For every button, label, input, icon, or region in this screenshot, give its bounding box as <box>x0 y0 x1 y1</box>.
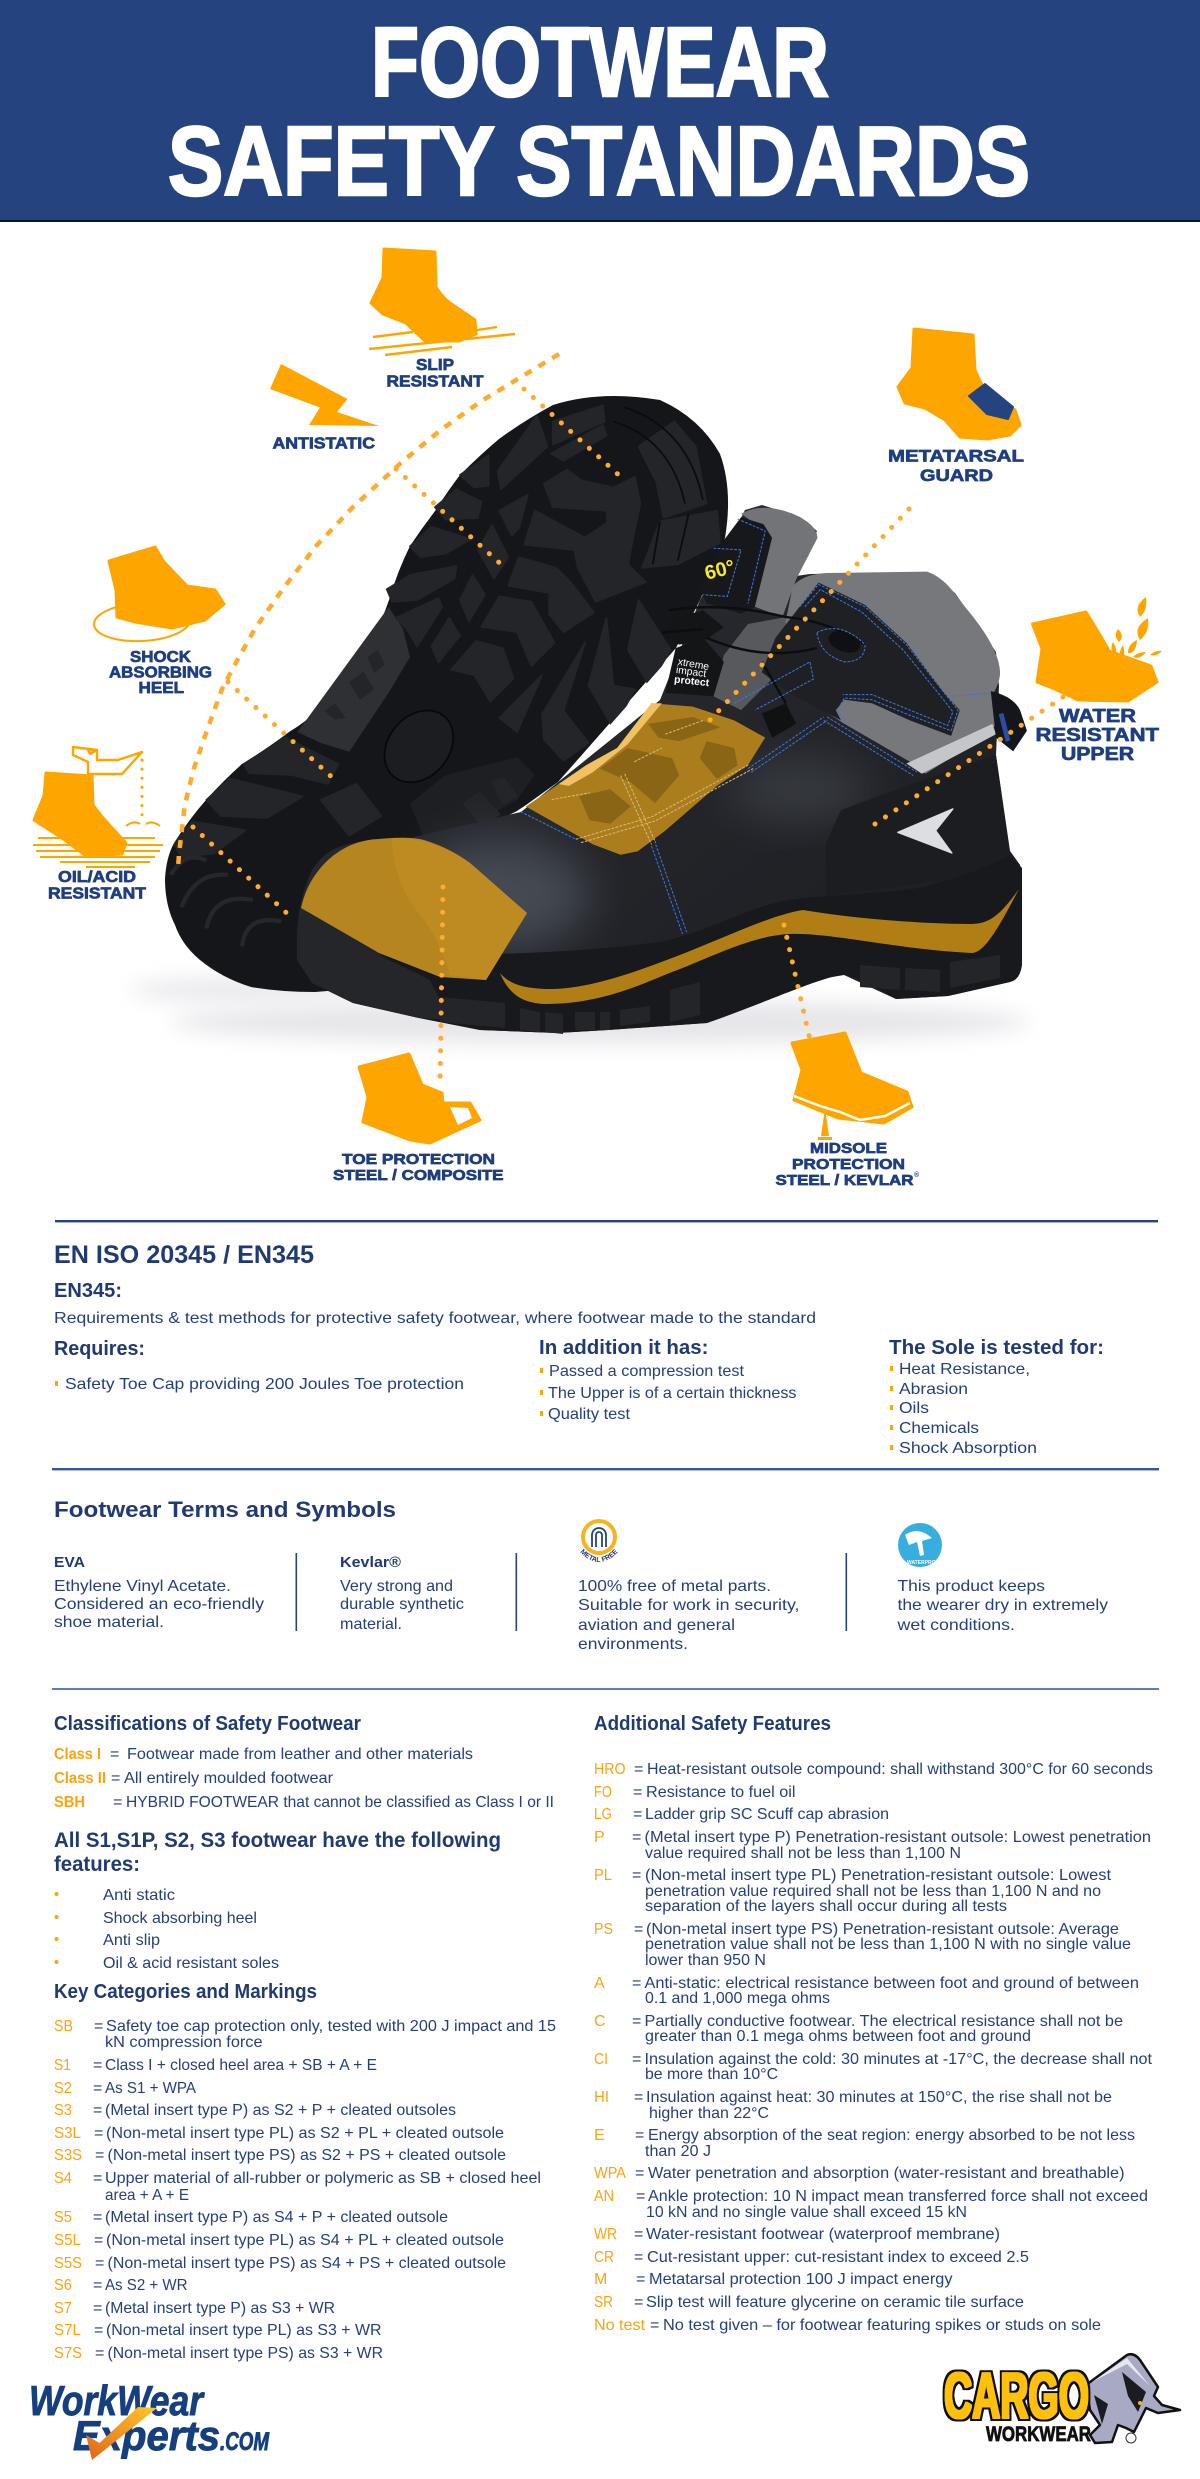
label: midsole protection: ® <box>914 1171 920 1179</box>
label: antistatic: ANTISTATIC <box>272 436 375 453</box>
class rows: = <box>113 1794 122 1811</box>
feature rows: Partially conductive footwear. The electrical resistance shall not be <box>644 2013 1123 2030</box>
category rows: (Non-metal insert type PL) as S2 + PL + cleated outsole <box>106 2125 504 2142</box>
category rows: S6 <box>54 2277 72 2294</box>
label: shock absorbing heel: ABSORBING <box>109 665 212 682</box>
icon: midsole protection <box>776 1033 920 1189</box>
column: sole tests: Oils <box>899 1400 929 1417</box>
feature rows: separation of the layers shall occur during all tests <box>645 1898 1007 1915</box>
heading: common features: All S1,S1P, S2, S3 footwear have the following <box>54 1829 501 1852</box>
category rows: S4 <box>54 2170 72 2187</box>
category rows: area + A + E <box>105 2187 189 2204</box>
term: waterproof <box>896 1578 1108 1634</box>
category rows <box>54 2018 556 2362</box>
panel: common features <box>54 1829 501 1972</box>
feature rows: = <box>634 1761 643 1778</box>
feature rows: PL <box>594 1867 612 1884</box>
label: metatarsal guard: GUARD <box>920 466 993 485</box>
term: EVA <box>54 1555 264 1631</box>
class rows: Footwear made from leather and other materials <box>127 1746 473 1763</box>
feature rows: than 20 J <box>645 2143 711 2160</box>
category rows: SB <box>54 2018 73 2035</box>
midsole highlight overlay <box>500 889 1019 1004</box>
heading: classifications: Classifications of Safety Footwear <box>54 1713 361 1735</box>
feature rows: = <box>634 2294 643 2311</box>
feature rows: Cut-resistant upper: cut-resistant index to exceed 2.5 <box>647 2249 1029 2266</box>
feature rows: PS <box>594 1921 613 1938</box>
feature rows: = <box>635 2127 644 2144</box>
feature rows: = <box>636 2271 645 2288</box>
column: sole tests: The Sole is tested for: <box>889 1337 1104 1359</box>
white gap between sole and boot <box>558 648 678 784</box>
category rows: = <box>93 2209 102 2226</box>
feature rows: HI <box>594 2089 609 2106</box>
feature rows: Heat-resistant outsole compound: shall withstand 300°C for 60 seconds <box>647 1761 1153 1778</box>
category rows: = <box>94 2018 103 2035</box>
feature rows: 0.1 and 1,000 mega ohms <box>645 1990 830 2007</box>
logo: WorkWear Experts <box>29 2377 270 2460</box>
badge text: WATERPROOF <box>907 1560 942 1566</box>
feature rows: lower than 950 N <box>645 1952 766 1969</box>
label: water resistant upper <box>1036 706 1159 764</box>
icon: slip resistant <box>369 249 515 390</box>
icon: metatarsal guard <box>888 329 1024 485</box>
feature rows: C <box>594 2013 606 2030</box>
panel: key categories <box>54 1981 556 2362</box>
lace area highlight overlay <box>526 703 765 855</box>
feature rows: Water-resistant footwear (waterproof membrane) <box>646 2226 1000 2243</box>
badge text: METAL FREE <box>580 1548 618 1562</box>
icon: waterproof badge <box>898 1523 942 1567</box>
term: waterproof: This product keeps <box>898 1578 1045 1595</box>
feature rows: Insulation against heat: 30 minutes at 150°C, the rise shall not be <box>646 2089 1112 2106</box>
class rows: All entirely moulded footwear <box>124 1770 334 1787</box>
icon: metal free badge <box>580 1519 618 1562</box>
category rows: S3L <box>54 2125 81 2142</box>
term: EVA: Considered an eco-friendly <box>54 1596 264 1613</box>
feature rows: higher than 22°C <box>649 2105 769 2122</box>
panel: footwear terms and symbols <box>52 1497 1159 1690</box>
class rows: Class I <box>54 1746 101 1763</box>
logo: WorkWear Experts: WorkWear <box>29 2377 205 2424</box>
term: Kevlar: Kevlar® <box>340 1555 401 1571</box>
category rows: S5L <box>54 2232 81 2249</box>
category rows: Safety toe cap protection only, tested with 200 J impact and 15 <box>106 2018 556 2035</box>
feature rows: WR <box>594 2226 617 2243</box>
outsole <box>297 855 1022 1033</box>
tongue label text: xtreme <box>677 657 710 673</box>
label: shock absorbing heel: SHOCK <box>130 649 191 666</box>
column: in addition: In addition it has: <box>539 1337 708 1359</box>
feature rows: greater than 0.1 mega ohms between foot and ground <box>645 2028 1031 2045</box>
boot floor shadow <box>130 978 1030 1044</box>
feature rows: = <box>636 2188 645 2205</box>
category rows: (Metal insert type P) as S2 + P + cleated outsoles <box>105 2102 456 2119</box>
feature rows: = <box>632 2013 641 2030</box>
category rows: As S2 + WR <box>105 2277 188 2294</box>
feature rows: = <box>634 2249 643 2266</box>
feature rows: No test given – for footwear featuring spikes or studs on sole <box>663 2317 1101 2334</box>
feature rows: WPA <box>594 2165 626 2182</box>
feature bullets: Anti static <box>103 1887 175 1904</box>
feature rows: = <box>632 1975 641 1992</box>
category rows: = <box>93 2170 102 2187</box>
feature bullets <box>54 1887 279 1972</box>
feature rows: = <box>632 1867 641 1884</box>
feature rows: AN <box>594 2188 614 2205</box>
feature bullets: Oil & acid resistant soles <box>103 1955 279 1972</box>
heading: additional features: Additional Safety Features <box>594 1713 831 1735</box>
feature rows: penetration value shall not be less than 1,100 N with no single value <box>645 1936 1131 1953</box>
category rows: As S1 + WPA <box>105 2080 196 2097</box>
feature rows: = <box>632 1829 641 1846</box>
feature rows: Energy absorption of the seat region: energy absorbed to be not less <box>648 2127 1135 2144</box>
feature rows: = <box>633 1784 642 1801</box>
label: oil/acid resistant: OIL/ACID <box>58 869 136 886</box>
column: requires: Safety Toe Cap providing 200 Joules Toe protection <box>65 1376 464 1393</box>
term: metal free: aviation and general <box>578 1617 735 1634</box>
feature rows: Ladder grip SC Scuff cap abrasion <box>645 1806 889 1823</box>
tongue label text <box>674 657 710 689</box>
label: slip resistant: RESISTANT <box>386 374 484 390</box>
category rows: S3S <box>54 2147 82 2164</box>
label: toe protection: TOE PROTECTION <box>342 1151 495 1168</box>
heading: key categories: Key Categories and Markings <box>54 1981 317 2003</box>
class rows: Class II <box>54 1770 106 1787</box>
class rows <box>54 1746 554 1811</box>
feature bullets: Shock absorbing heel <box>103 1910 257 1927</box>
category rows: S5S <box>54 2255 82 2272</box>
label: water resistant upper: RESISTANT <box>1036 725 1159 745</box>
panel: additional safety features <box>594 1713 1153 2334</box>
boot upper details <box>521 508 1027 934</box>
feature rows: E <box>594 2127 605 2144</box>
term: metal free: Suitable for work in security, <box>578 1597 800 1614</box>
term: EVA: Ethylene Vinyl Acetate. <box>54 1578 231 1595</box>
feature rows: = <box>632 2051 641 2068</box>
category rows: S7 <box>54 2300 72 2317</box>
feature rows: Insulation against the cold: 30 minutes at -17°C, the decrease shall not <box>644 2051 1153 2068</box>
panel: EN ISO 20345 / EN345 <box>52 1220 1159 1470</box>
category rows: (Non-metal insert type PS) as S2 + PS + cleated outsole <box>108 2147 506 2164</box>
label: metatarsal guard: METATARSAL <box>888 446 1024 466</box>
category rows: = <box>93 2057 102 2074</box>
category rows: S5 <box>54 2209 72 2226</box>
category rows: S1 <box>54 2057 71 2074</box>
feature rows: = <box>633 1806 642 1823</box>
category rows: Upper material of all-rubber or polymeric as SB + closed heel <box>105 2170 541 2187</box>
category rows: = <box>94 2125 103 2142</box>
icon: water resistant upper <box>1032 597 1162 764</box>
icon: oil / acid resistant <box>33 747 163 903</box>
logo: WorkWear Experts: Experts <box>73 2412 220 2459</box>
feature rows: Slip test will feature glycerine on ceramic tile surface <box>646 2294 1024 2311</box>
label: midsole protection: PROTECTION <box>792 1156 905 1173</box>
label: oil/acid resistant <box>48 869 146 903</box>
feature rows: M <box>594 2271 607 2288</box>
column: in addition: Quality test <box>548 1406 631 1423</box>
term: waterproof: wet conditions. <box>896 1617 1015 1634</box>
feature rows: FO <box>594 1784 612 1801</box>
feature rows: penetration value required shall not be less than 1,100 N and no <box>645 1883 1101 1900</box>
column: sole tests <box>889 1337 1104 1457</box>
term: Kevlar <box>340 1555 464 1633</box>
category rows: = <box>93 2102 102 2119</box>
logo: WorkWear Experts: .COM <box>220 2428 270 2456</box>
category rows: S2 <box>54 2080 72 2097</box>
column: requires: Requires: <box>54 1338 145 1360</box>
category rows: = <box>94 2322 103 2339</box>
feature rows: A <box>594 1975 605 1992</box>
category rows: = <box>93 2277 102 2294</box>
feature bullets: Anti slip <box>103 1932 160 1949</box>
title: FOOTWEAR <box>371 7 829 117</box>
label: midsole protection <box>776 1140 920 1189</box>
heading: EN ISO: EN ISO 20345 / EN345 <box>54 1241 314 1269</box>
feature rows: = <box>634 2089 643 2106</box>
feature rows: No test <box>594 2317 646 2334</box>
term: metal free <box>578 1578 800 1653</box>
feature rows: P <box>594 1829 605 1846</box>
tongue label text: impact <box>675 665 707 680</box>
feature rows: (Non-metal insert type PS) Penetration-resistant outsole: Average <box>646 1921 1119 1938</box>
label: shock absorbing heel <box>109 649 212 697</box>
feature rows: = <box>634 1921 643 1938</box>
term: metal free: 100% free of metal parts. <box>578 1578 771 1595</box>
heading: common features <box>54 1829 501 1876</box>
category rows: (Non-metal insert type PL) as S4 + PL + cleated outsole <box>106 2232 504 2249</box>
label: shock absorbing heel: HEEL <box>138 680 184 697</box>
column: sole tests: Abrasion <box>899 1381 968 1398</box>
term: EVA: EVA <box>54 1555 86 1571</box>
dotted leader lines <box>193 389 1063 1093</box>
feature rows: = <box>634 2226 643 2243</box>
feature rows: Ankle protection: 10 N impact mean transferred force shall not exceed <box>648 2188 1148 2205</box>
class rows: SBH <box>54 1794 85 1811</box>
label: toe protection <box>333 1151 504 1184</box>
feature rows: SR <box>594 2294 613 2311</box>
category rows: = <box>95 2255 104 2272</box>
feature rows: CI <box>594 2051 608 2068</box>
category rows: = <box>94 2232 103 2249</box>
feature rows: Metatarsal protection 100 J impact energy <box>649 2271 952 2288</box>
feature rows: HRO <box>594 1761 626 1778</box>
bull mascot <box>1086 2354 1180 2443</box>
label: slip resistant: SLIP <box>416 357 454 374</box>
title <box>168 7 1030 216</box>
term: waterproof: the wearer dry in extremely <box>898 1597 1108 1614</box>
intro text: Requirements & test methods for protective safety footwear, where footwear made to the standard <box>54 1310 816 1327</box>
column: sole tests: Chemicals <box>899 1420 979 1437</box>
label: midsole protection: STEEL / KEVLAR <box>776 1172 914 1189</box>
dashed arc guide <box>178 354 559 868</box>
feature rows: CR <box>594 2249 614 2266</box>
term: Kevlar: material. <box>340 1616 402 1633</box>
term: EVA: shoe material. <box>54 1614 164 1631</box>
class rows: HYBRID FOOTWEAR that cannot be classified as Class I or II <box>126 1794 554 1811</box>
category rows: = <box>93 2300 102 2317</box>
feature rows <box>594 1761 1153 2334</box>
category rows: = <box>95 2147 104 2164</box>
heading: terms: Footwear Terms and Symbols <box>54 1497 396 1522</box>
feature rows: be more than 10°C <box>645 2066 778 2083</box>
toe cap highlight overlay <box>301 838 527 980</box>
feature rows: 10 kN and no single value shall exceed 15 kN <box>646 2204 967 2221</box>
category rows: = <box>93 2080 102 2097</box>
work boot <box>297 505 1027 1034</box>
feature rows: LG <box>594 1806 612 1823</box>
column: in addition <box>539 1337 796 1423</box>
panel: classifications <box>54 1713 554 1811</box>
term: Kevlar: durable synthetic <box>340 1596 464 1613</box>
column: in addition: Passed a compression test <box>549 1363 745 1380</box>
logo text on tongue: 60° <box>703 556 737 585</box>
icon: shock absorbing heel <box>93 547 224 697</box>
column: sole tests: Heat Resistance, <box>899 1361 1030 1378</box>
label: slip resistant <box>386 357 484 390</box>
title: SAFETY STANDARDS <box>168 106 1030 216</box>
label: toe protection: STEEL / COMPOSITE <box>333 1167 504 1184</box>
category rows: (Metal insert type P) as S3 + WR <box>105 2300 335 2317</box>
column: sole tests: Shock Absorption <box>899 1440 1037 1457</box>
column: in addition: The Upper is of a certain thickness <box>548 1385 796 1402</box>
category rows: (Non-metal insert type PS) as S4 + PS + cleated outsole <box>108 2255 506 2272</box>
heading: EN345: EN345: <box>54 1280 122 1302</box>
category rows: S7L <box>54 2322 81 2339</box>
logo: Cargo Workwear <box>944 2354 1180 2446</box>
category rows: kN compression force <box>105 2034 263 2051</box>
boot sole view <box>165 396 728 992</box>
feature rows: = <box>650 2317 659 2334</box>
Cargo wordmark: CARGO <box>944 2359 1089 2432</box>
feature rows: Anti-static: electrical resistance between foot and ground of between <box>644 1975 1139 1992</box>
category rows: Class I + closed heel area + SB + A + E <box>105 2057 377 2074</box>
category rows: S7S <box>54 2345 82 2362</box>
column: requires <box>54 1338 464 1393</box>
feature rows: (Non-metal insert type PL) Penetration-resistant outsole: Lowest <box>645 1867 1112 1884</box>
label: water resistant upper: UPPER <box>1061 744 1134 764</box>
icon: toe protection <box>333 1054 504 1184</box>
feature rows: (Metal insert type P) Penetration-resistant outsole: Lowest penetration <box>644 1829 1151 1846</box>
label: water resistant upper: WATER <box>1059 706 1136 726</box>
tongue label text: protect <box>674 675 710 689</box>
category rows: = <box>95 2345 104 2362</box>
category rows: (Metal insert type P) as S4 + P + cleated outsole <box>105 2209 448 2226</box>
feature rows: = <box>635 2165 644 2182</box>
label: metatarsal guard <box>888 446 1024 485</box>
header banner <box>0 0 1200 222</box>
feature rows: Resistance to fuel oil <box>646 1784 796 1801</box>
term: metal free: environments. <box>578 1636 688 1653</box>
category rows: (Non-metal insert type PS) as S3 + WR <box>108 2345 383 2362</box>
heel loop tab <box>991 691 1027 751</box>
category rows: (Non-metal insert type PL) as S3 + WR <box>106 2322 382 2339</box>
feature rows: Water penetration and absorption (water-resistant and breathable) <box>648 2165 1124 2182</box>
class rows: = <box>110 1746 119 1763</box>
label: midsole protection: MIDSOLE <box>810 1140 887 1157</box>
icon: antistatic <box>270 364 379 453</box>
reflective arrow logo <box>898 809 953 853</box>
feature rows: value required shall not be less than 1,100 N <box>645 1845 961 1862</box>
label: oil/acid resistant: RESISTANT <box>48 886 146 903</box>
heading: common features: features: <box>54 1853 140 1876</box>
term: Kevlar: Very strong and <box>340 1578 453 1595</box>
category rows: S3 <box>54 2102 72 2119</box>
class rows: = <box>111 1770 120 1787</box>
Workwear wordmark: WORKWEAR <box>986 2423 1091 2446</box>
